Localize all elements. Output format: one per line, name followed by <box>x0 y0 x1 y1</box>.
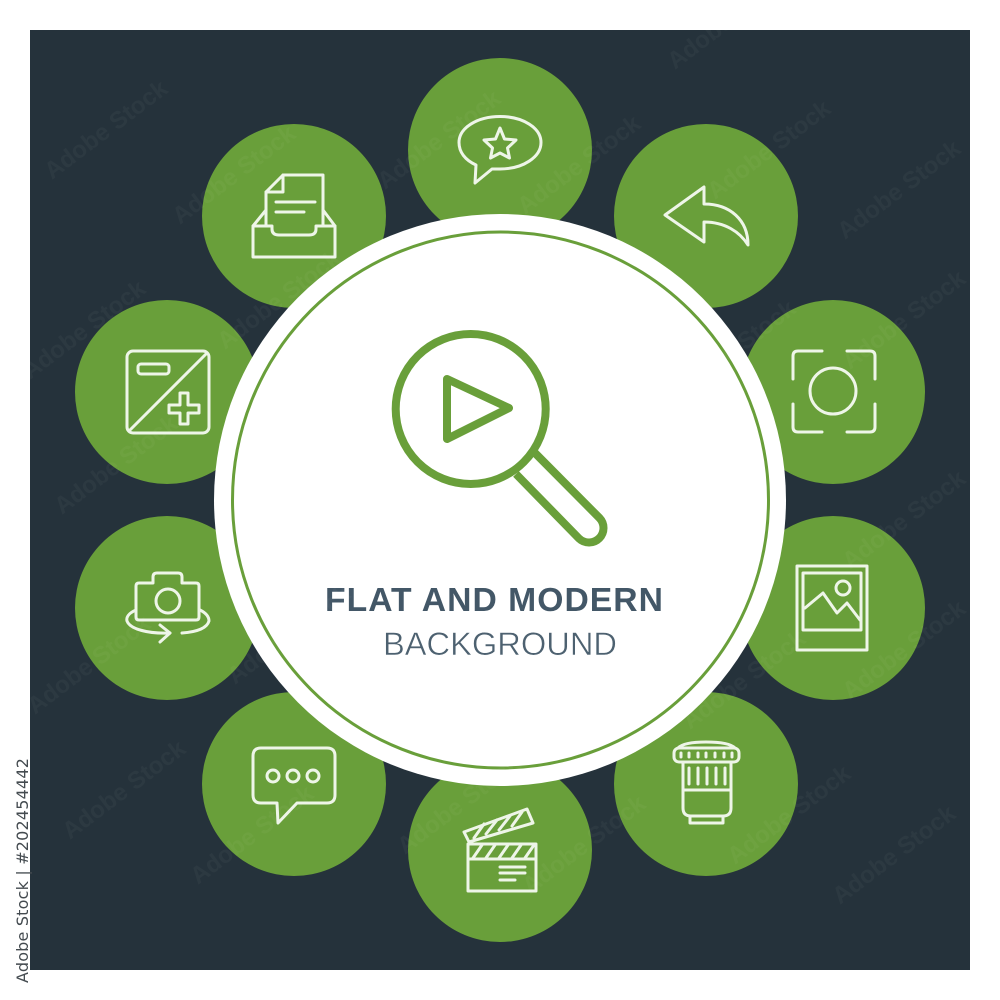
watermark layer: Adobe Stock <box>39 75 173 185</box>
watermark layer: Adobe Stock <box>667 295 801 405</box>
play triangle <box>447 379 509 439</box>
watermark layer: Adobe Stock <box>167 120 301 230</box>
icon: reply arrow <box>665 187 748 245</box>
watermark layer: Adobe Stock <box>22 610 156 720</box>
green icon discs <box>75 58 925 942</box>
icon: inbox tray with document <box>253 175 335 257</box>
icon: speech bubble with star <box>459 116 541 183</box>
icon: camera lens <box>674 742 739 823</box>
central white circle <box>214 214 786 786</box>
watermark layer: Adobe Stock <box>57 735 191 845</box>
icon: exposure plus minus <box>127 351 209 433</box>
central green ring <box>232 232 768 768</box>
watermark layer: Adobe Stock <box>222 580 356 690</box>
icon: rotating camera <box>127 573 209 642</box>
watermark layer: Adobe Stock <box>392 750 526 860</box>
watermark layer: Adobe Stock <box>837 465 971 575</box>
watermark layer: Adobe Stock <box>677 625 811 735</box>
watermark layer: Adobe Stock <box>837 595 971 705</box>
icon: focus frame <box>793 351 875 432</box>
title: FLAT AND MODERN <box>325 581 664 618</box>
main icon: magnifier with play button <box>396 334 604 543</box>
icon: chat bubble with dots <box>253 748 335 823</box>
watermark layer: Adobe Stock <box>49 410 183 520</box>
watermark layer: Adobe Stock <box>517 790 651 900</box>
magnifier handle <box>516 453 604 543</box>
side stock id text: Adobe Stock | #202454442 <box>13 758 32 983</box>
watermark layer: Adobe Stock <box>372 85 506 195</box>
icon: photo frame <box>797 566 867 650</box>
watermark layer: Adobe Stock <box>17 275 151 385</box>
watermark layer: Adobe Stock <box>212 245 346 355</box>
subtitle: BACKGROUND <box>383 626 617 662</box>
magnifier lens <box>396 334 546 484</box>
icon: film clapperboard <box>464 809 536 891</box>
watermark layer: Adobe Stock <box>185 780 319 890</box>
watermark layer: Adobe Stock <box>837 265 971 375</box>
watermark layer: Adobe Stock <box>702 95 836 205</box>
watermark layer: Adobe Stock <box>827 800 961 910</box>
watermark layer: Adobe Stock <box>512 110 646 220</box>
watermark layer: Adobe Stock <box>722 760 856 870</box>
watermark layer: Adobe Stock <box>832 135 966 245</box>
